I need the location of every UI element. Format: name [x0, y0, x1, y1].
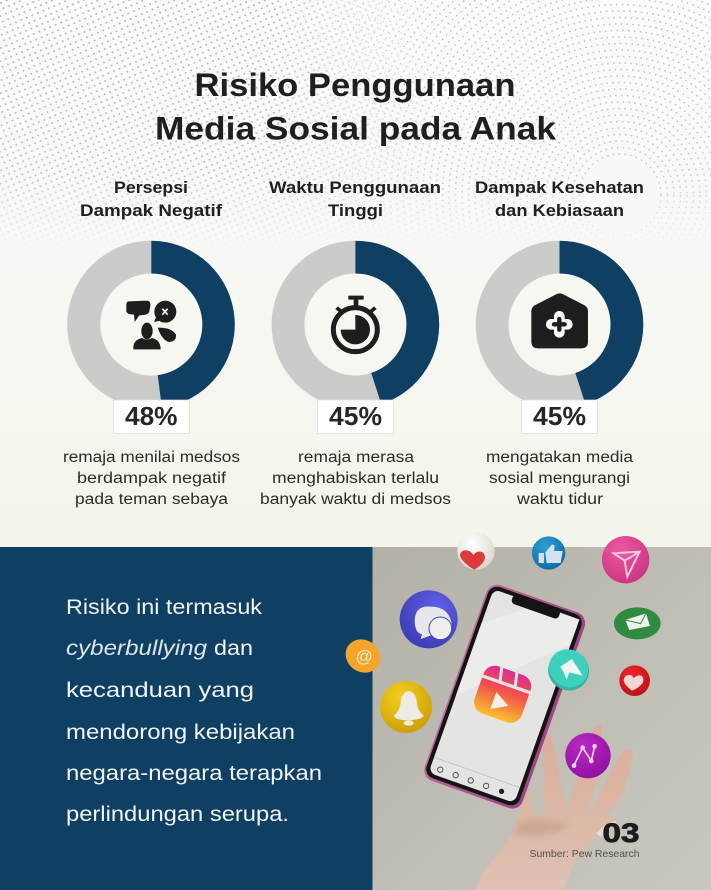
icon: heart ball: [457, 532, 495, 570]
icon: chat ball: [400, 590, 458, 648]
icon: health house: [531, 293, 588, 348]
icon: at sign badge: [339, 633, 387, 679]
title: Media Sosial pada Anak: [155, 110, 556, 146]
percentage label 48%: [113, 400, 189, 434]
percentage label 48%: 48%: [125, 401, 178, 431]
icon: megaphone ball: [541, 642, 597, 698]
phone: [421, 582, 588, 812]
icon: stopwatch: [333, 296, 377, 352]
heading: persepsi: [80, 178, 222, 220]
percentage label 45%: 45%: [329, 401, 382, 431]
icon: red heart ball: [619, 665, 650, 696]
source: Sumber: Pew Research: [530, 848, 640, 860]
percentage label 45%: 45%: [533, 401, 586, 431]
description: kesehatan: waktu tidur: [516, 491, 603, 508]
description: kesehatan: [486, 449, 633, 508]
heading: waktu penggunaan: Tinggi: [328, 201, 383, 220]
heading: waktu penggunaan: Waktu Penggunaan: [269, 178, 441, 197]
statement text: kecanduan yang: [66, 678, 254, 702]
percentage label 45%: [318, 400, 394, 434]
title: [155, 67, 556, 146]
heading: dampak kesehatan: dan Kebiasaan: [495, 201, 624, 220]
statement text: mendorong kebijakan: [66, 720, 295, 744]
icon: at sign badge: @: [356, 647, 373, 666]
statement text: perlindungan serupa.: [66, 802, 289, 826]
donut chart 48%: [67, 241, 235, 408]
heading: persepsi: Dampak Negatif: [80, 201, 222, 220]
description: waktu: [260, 449, 451, 508]
icon: reels logo: [469, 661, 537, 727]
donut chart 45%: [476, 241, 643, 408]
description: persepsi: pada teman sebaya: [75, 491, 228, 508]
panel: waktu penggunaan tinggi: [260, 178, 451, 508]
heading: persepsi: Persepsi: [114, 178, 188, 197]
photo panel: hand with phone: [372, 532, 711, 890]
panel: persepsi dampak negatif: [63, 178, 240, 508]
icon: bell ball: [380, 681, 432, 733]
title: Risiko Penggunaan: [194, 67, 516, 103]
percentage label 45%: [522, 400, 598, 434]
statement text: dan: [214, 636, 253, 660]
description: persepsi: remaja menilai medsos: [63, 449, 240, 466]
description: kesehatan: mengatakan media: [486, 449, 633, 466]
page number: 03: [602, 818, 640, 848]
description: persepsi: [63, 449, 240, 508]
panel: blue statement: [0, 547, 373, 890]
description: waktu: banyak waktu di medsos: [260, 491, 451, 508]
description: waktu: remaja merasa: [298, 449, 414, 466]
statement text: negara-negara terapkan: [66, 761, 322, 785]
description: kesehatan: sosial mengurangi: [489, 470, 630, 487]
icon: send ball: [602, 536, 649, 583]
description: waktu: menghabiskan terlalu: [272, 470, 439, 487]
icon: network ball: [565, 733, 611, 778]
icon: mail ball: [614, 607, 661, 639]
heading: waktu penggunaan: [269, 178, 441, 220]
icon: speech bubbles and person: [126, 301, 176, 349]
heading: dampak kesehatan: [475, 178, 644, 220]
icon: thumbs up ball: [532, 536, 565, 570]
hand: [475, 725, 633, 890]
heading: dampak kesehatan: Dampak Kesehatan: [475, 178, 644, 197]
donut chart 45%: [272, 241, 439, 408]
panel: dampak kesehatan dan kebiasaan: [475, 178, 644, 508]
statement text: [66, 595, 322, 826]
statement text: cyberbullying: [66, 636, 207, 660]
description: persepsi: berdampak negatif: [77, 470, 227, 487]
statement text: Risiko ini termasuk: [66, 595, 262, 619]
